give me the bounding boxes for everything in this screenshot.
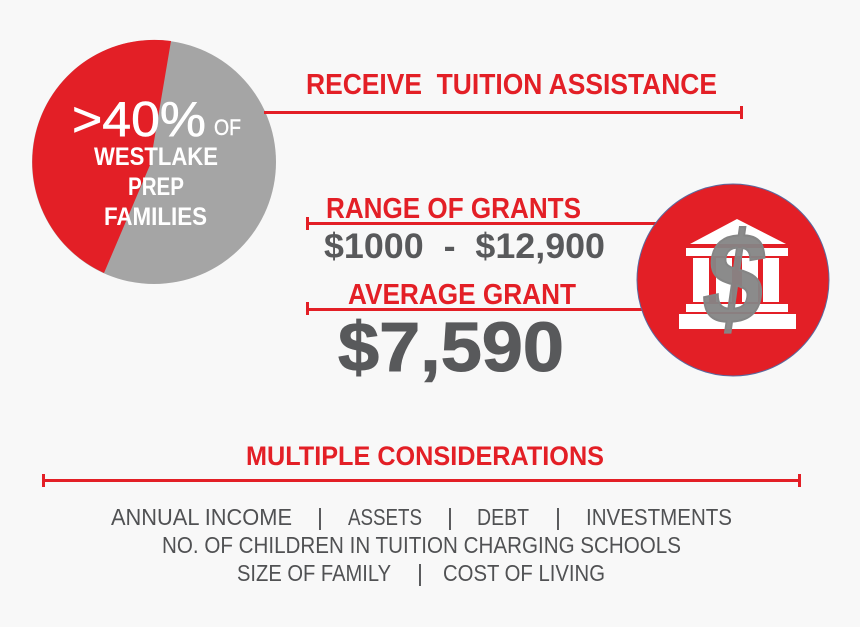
pie label [72,93,241,231]
considerations list: SIZE OF FAMILY [237,560,391,586]
heading: range of grants: RANGE OF GRANTS [326,193,581,225]
considerations list: COST OF LIVING [443,560,605,586]
grant range value: $1000 - $12,900 [324,227,605,266]
pie label: PREP [128,173,184,201]
pie chart: 40% of families [32,40,276,284]
considerations list: DEBT [477,504,529,530]
pie label: WESTLAKE [94,143,218,171]
considerations list: | [417,560,423,586]
considerations list: NO. OF CHILDREN IN TUITION CHARGING SCHOOLS [162,532,681,558]
icon: bank with dollar sign [637,184,829,376]
heading: multiple considerations: MULTIPLE CONSIDERATIONS [246,441,604,471]
pie label: FAMILIES [104,203,207,231]
pie label: >40% [72,93,206,147]
heading: average grant: AVERAGE GRANT [348,279,576,311]
heading: receive tuition assistance: RECEIVE TUITION ASSISTANCE [306,69,717,101]
connector line: range of grants [306,217,659,230]
pie label: OF [214,115,241,140]
considerations list [111,504,732,586]
considerations list: ASSETS [348,504,422,530]
considerations list: INVESTMENTS [586,504,732,530]
considerations list: | [317,504,323,530]
considerations list: ANNUAL INCOME [111,504,292,530]
considerations list: | [555,504,561,530]
connector line: tuition assistance [264,106,743,119]
icon: bank with dollar sign: $ [695,207,775,351]
average grant value: $7,590 [338,308,564,386]
divider bar: multiple considerations [42,474,801,487]
considerations list: | [447,504,453,530]
connector line: average grant [306,302,642,315]
